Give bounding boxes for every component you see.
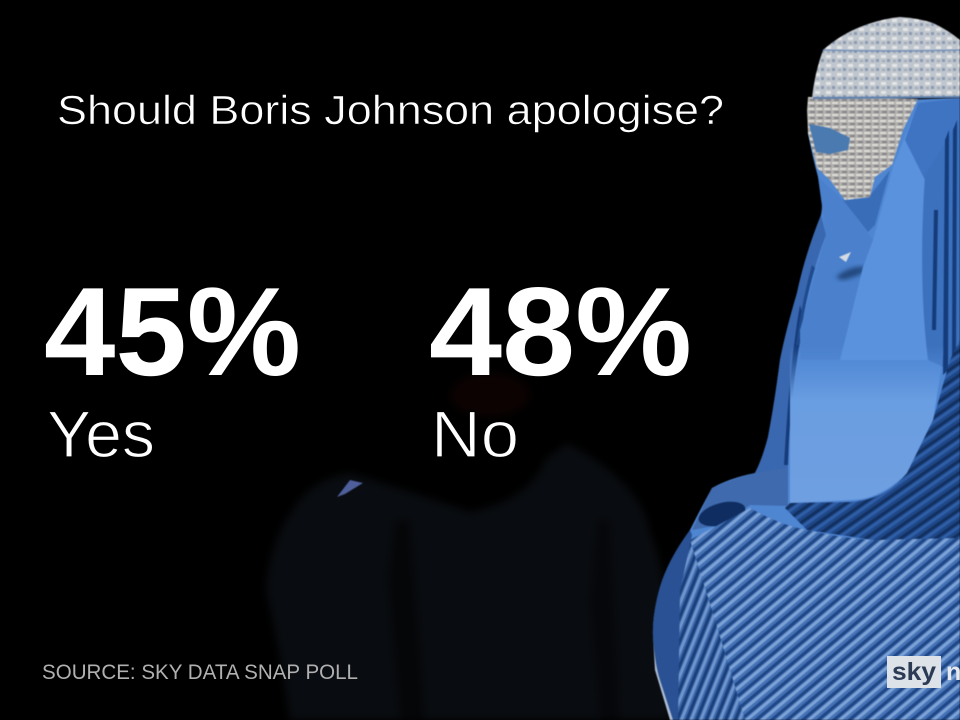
shadow pleats under dress xyxy=(785,340,960,540)
woman in blue burqa xyxy=(653,98,960,720)
left pleats xyxy=(676,540,745,720)
title: Should Boris Johnson apologise? xyxy=(57,87,724,133)
eye mesh xyxy=(809,124,850,154)
left side pleats xyxy=(755,215,826,473)
stat: no: 48% xyxy=(429,261,692,402)
chin shadow xyxy=(836,267,866,280)
left veil panel under lace xyxy=(800,177,873,360)
blue patch on shoulder xyxy=(337,480,363,497)
stat: yes xyxy=(44,261,301,471)
embroidered cap and face grille xyxy=(807,17,960,200)
burqa silhouette xyxy=(653,98,960,720)
source: SOURCE: SKY DATA SNAP POLL xyxy=(42,661,358,684)
right darker veil top xyxy=(905,98,960,200)
stat: yes: Yes xyxy=(47,397,155,471)
stat: no: No xyxy=(431,397,519,471)
stat: no xyxy=(429,261,692,471)
lower dress light panel xyxy=(790,345,945,503)
white fly mark xyxy=(839,252,851,262)
shoulder fold xyxy=(692,468,788,530)
stat: yes: 45% xyxy=(44,261,301,402)
lower pleated drape xyxy=(690,508,960,720)
sky news logo xyxy=(887,656,960,688)
faded man in background xyxy=(266,373,672,720)
sky news logo: sky xyxy=(892,658,936,686)
centre fold xyxy=(840,98,960,360)
right vertical pleats xyxy=(922,120,960,370)
outer edge fold xyxy=(653,530,692,720)
